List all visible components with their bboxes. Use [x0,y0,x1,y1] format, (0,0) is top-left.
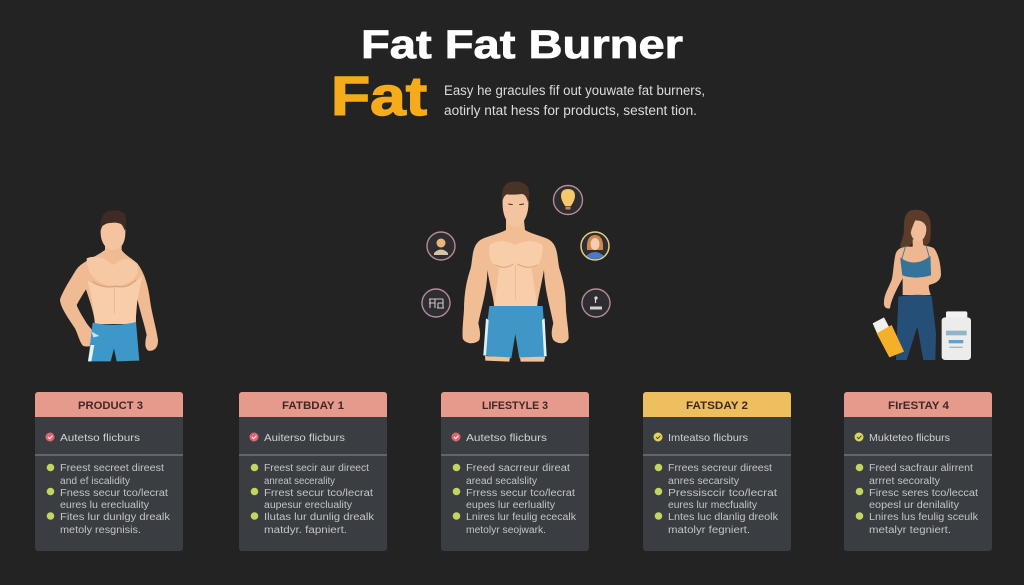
bullet list: Fness secur tco/lecrat [60,488,168,499]
icon: woman portrait [581,232,609,260]
panel heading: FATSDAY 2 [686,400,748,412]
bullet list: and ef iscalidity [60,476,130,487]
bullet list: arrret secoralty [869,476,940,487]
status row: Auiterso flicburs [264,432,345,444]
bullet list: metolyr seojwark. [466,525,546,536]
panel: Product 3 [35,392,183,551]
intro text: aotirly ntat hess for products, sestent tion. [444,103,697,118]
icon: text badge [422,289,450,317]
icon: person badge [427,232,455,260]
bullet list [453,463,577,536]
bullet list: Lntes luc dlanlig dreolk [668,512,779,523]
status row: Autetso flicburs [60,432,140,444]
bullet list: Firesc seres tco/leccat [869,488,978,499]
bullet list: eopesl ur denilality [869,500,959,511]
bullet list: Freed sacrreur direat [466,463,570,474]
panel: Fatbday 1 [239,392,387,551]
bullet list [251,463,375,536]
bullet list: Lnires lus feulig sceulk [869,512,979,523]
bullet list: matdyr. fapniert. [264,525,347,536]
bullet list: anreat secerality [264,476,335,487]
bullet list: eupes lur eerluality [466,500,555,511]
panel: Firestay 4 [844,392,992,551]
bullet list: Freed sacfraur alirrent [869,463,973,474]
bullet list: metalyr tegniert. [869,525,951,536]
panel heading: LIFESTYLE 3 [482,400,548,412]
status row: Mukteteo flicburs [869,432,950,444]
title: Fat Fat Burner [361,23,683,67]
bullet list: Ilutas lur dunlig drealk [264,512,375,523]
panel heading: FATBDAY 1 [282,400,344,412]
bullet list: aread secalslity [466,476,537,487]
bullet list: eures lu erecluality [60,500,149,511]
panel header [441,392,589,417]
panel: Fatsday 2 [643,392,791,551]
panel header [35,392,183,417]
bullet list: Frrees secreur direest [668,463,772,474]
intro text: Easy he gracules fif out youwate fat burners, [444,83,705,98]
figure: central man [462,182,569,362]
bullet list [47,463,171,536]
figure: woman with supplements [884,210,941,360]
bullet list: Freest secreet direest [60,463,164,474]
icon: small figure badge [582,289,610,317]
figure: left man [60,210,158,361]
bullet list: Fites lur dunlgy drealk [60,512,171,523]
bullet list: Freest secir aur direect [264,463,369,474]
status row: Imteatso flicburs [668,432,748,444]
bullet list: aupesur erecluality [264,500,352,511]
panel heading: FIrESTAY 4 [888,400,950,412]
panel: Lifestyle 3 [441,392,589,551]
icon: white supplement bottle [942,311,971,360]
bullet list: Pressisccir tco/lecrat [668,488,777,499]
bullet list: Frress secur tco/lecrat [466,488,575,499]
icon: light bulb [554,186,582,214]
bullet list: Lnires lur feulig ececalk [466,512,577,523]
intro text [444,83,705,118]
panel header [643,392,791,417]
bullet list [655,463,779,536]
bullet list: anres secarsity [668,476,739,487]
highlighted word: Fat: Fat [331,65,427,127]
bullet list: eures lur mecfuality [668,500,757,511]
bullet list: metoly resgnisis. [60,525,141,536]
bullet list: Frrest secur tco/lecrat [264,488,373,499]
status row: Autetso flicburs [466,432,547,444]
icon: orange supplement bottle [873,317,904,357]
bullet list [856,463,979,536]
bullet list: matolyr fegniert. [668,525,750,536]
panel header [844,392,992,417]
panel header [239,392,387,417]
panel heading: PRODUCT 3 [78,400,143,412]
